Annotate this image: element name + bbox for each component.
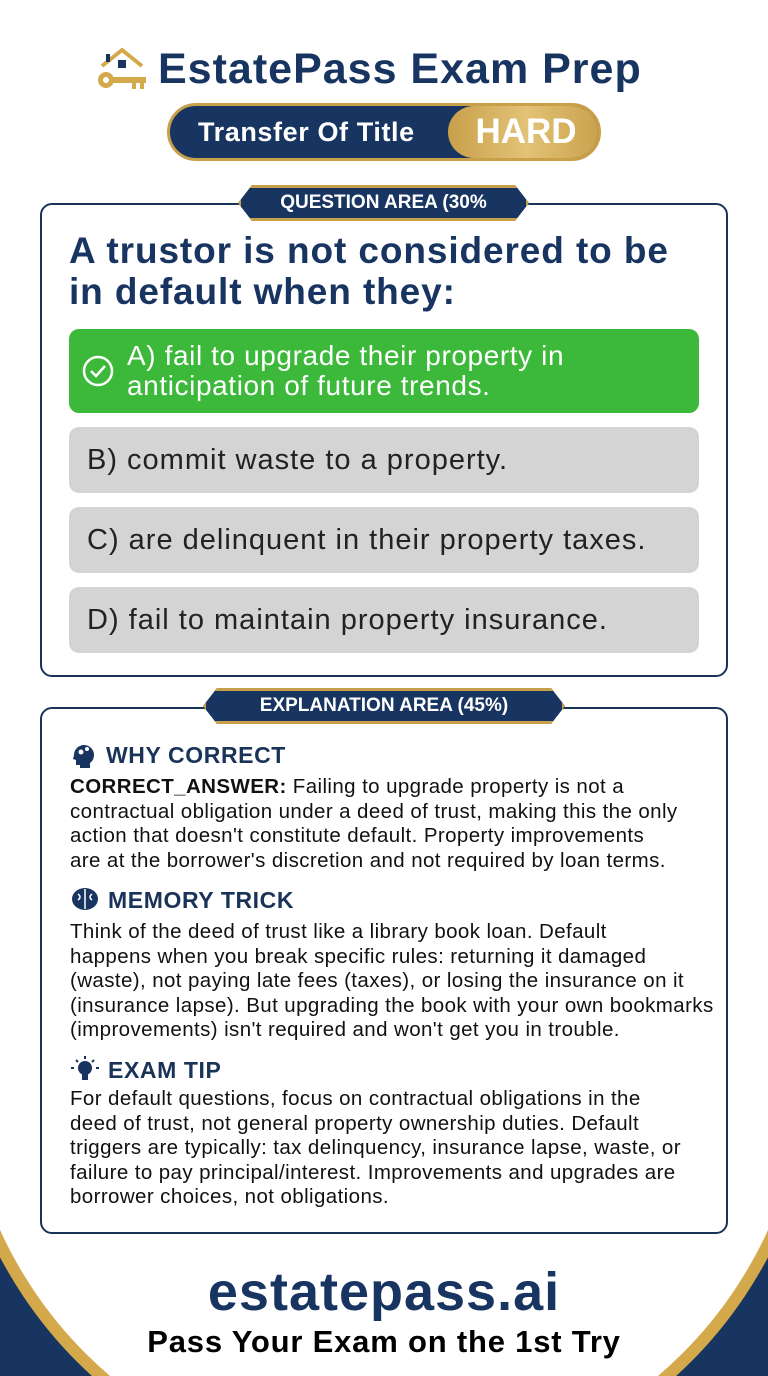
text: memory trick: Think of the deed of trust like a library book loan. Default xyxy=(70,920,607,943)
text: exam tip: For default questions, focus on contractual obligations in the xyxy=(70,1087,641,1110)
question text: in default when they: xyxy=(69,271,456,312)
text: why correct: contractual obligation under a deed of trust, making this the only xyxy=(70,800,678,822)
text: memory trick: (improvements) isn't required and won't get you in trouble. xyxy=(70,1018,620,1041)
option D xyxy=(69,587,699,653)
text: memory trick: (insurance lapse). But upgrading the book with your own bookmarks xyxy=(70,994,714,1016)
difficulty badge xyxy=(448,106,604,158)
heading: why correct: WHY CORRECT xyxy=(106,742,286,768)
panel: explanation xyxy=(40,707,728,1234)
icon: lightbulb xyxy=(71,1056,99,1080)
option B: B) commit waste to a property. xyxy=(87,444,508,476)
option B xyxy=(69,427,699,493)
question text xyxy=(69,230,669,312)
text: memory trick: happens when you break specific rules: returning it damaged xyxy=(70,944,646,968)
heading: exam tip: EXAM TIP xyxy=(108,1056,221,1082)
option C: C) are delinquent in their property taxes. xyxy=(87,524,646,556)
option A correct: A) fail to upgrade their property in xyxy=(127,340,564,371)
footer url: estatepass.ai xyxy=(208,1262,560,1322)
text: exam tip: deed of trust, not general property ownership duties. Default xyxy=(70,1112,639,1134)
text: memory trick xyxy=(70,920,714,1041)
text: exam tip: borrower choices, not obligations. xyxy=(70,1185,389,1208)
text: why correct: are at the borrower's discretion and not required by loan terms. xyxy=(70,848,666,872)
panel: question xyxy=(40,203,728,677)
option C xyxy=(69,507,699,573)
icon: house key xyxy=(98,48,146,89)
text: exam tip: failure to pay principal/interest. Improvements and upgrades are xyxy=(70,1160,676,1184)
icon: check xyxy=(82,356,114,386)
text: why correct: action that doesn't constitute default. Property improvements xyxy=(70,824,644,847)
option A correct: anticipation of future trends. xyxy=(127,370,491,401)
text: exam tip xyxy=(70,1087,681,1208)
banner: question area xyxy=(238,185,529,221)
header title: EstatePass Exam Prep xyxy=(158,44,642,92)
difficulty badge: HARD xyxy=(475,112,577,151)
category pill: Transfer Of Title xyxy=(198,117,415,147)
text: exam tip: triggers are typically: tax delinquency, insurance lapse, waste, or xyxy=(70,1136,681,1159)
option A correct xyxy=(69,329,699,413)
icon: head gears xyxy=(73,745,94,768)
banner: question area: QUESTION AREA (30% xyxy=(280,192,487,213)
text: memory trick: (waste), not paying late fees (taxes), or losing the insurance on it xyxy=(70,969,684,992)
footer tagline: Pass Your Exam on the 1st Try xyxy=(147,1324,621,1359)
option D: D) fail to maintain property insurance. xyxy=(87,604,608,636)
text: why correct xyxy=(70,775,678,872)
text: why correct: CORRECT_ANSWER: Failing to upgrade property is not a xyxy=(70,775,624,798)
heading: memory trick: MEMORY TRICK xyxy=(108,886,294,912)
bottom arc background xyxy=(0,1230,768,1376)
icon: brain xyxy=(72,888,98,910)
banner: explanation area: EXPLANATION AREA (45%) xyxy=(260,695,508,716)
question text: A trustor is not considered to be xyxy=(69,230,669,271)
category pill xyxy=(167,103,601,161)
banner: explanation area xyxy=(203,688,565,724)
